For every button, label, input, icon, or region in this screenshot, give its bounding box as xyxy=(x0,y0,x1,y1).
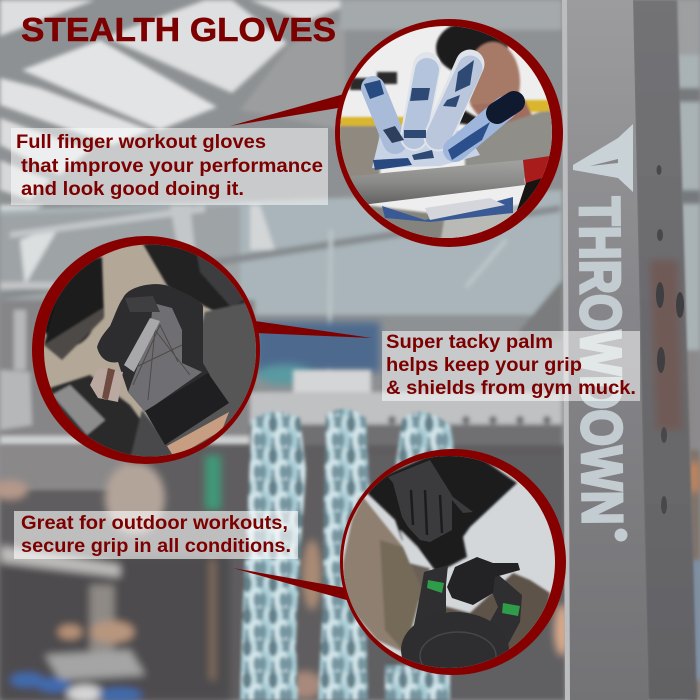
wrist xyxy=(167,412,229,456)
glove back and fingers xyxy=(97,284,210,412)
callout: full finger gloves: that improve your performance xyxy=(21,155,323,177)
callout: tacky palm: Super tacky palm xyxy=(386,331,553,353)
arrow: top callout pointer xyxy=(230,94,344,126)
callout: full finger gloves: and look good doing it. xyxy=(21,178,244,200)
callout: tacky palm: helps keep your grip xyxy=(386,354,582,376)
bar xyxy=(350,160,525,205)
chains xyxy=(240,409,456,700)
logo mark xyxy=(573,124,633,192)
callout: outdoor workouts: Great for outdoor workouts, xyxy=(21,512,288,534)
lower hand xyxy=(447,557,520,605)
kettlebell xyxy=(401,566,522,668)
green tape bands xyxy=(427,580,444,593)
rack post with logo xyxy=(562,0,697,700)
callout: full finger gloves: Full finger workout gloves xyxy=(16,131,266,153)
callout: tacky palm: & shields from gym muck. xyxy=(386,377,636,399)
callout: outdoor workouts: secure grip in all conditions. xyxy=(21,535,291,557)
callout: full finger gloves xyxy=(11,128,328,205)
dumbbell handle xyxy=(124,318,160,372)
logo wordmark: THROWDOWN xyxy=(567,197,634,525)
arrow: bottom callout pointer xyxy=(233,568,350,601)
logo dot xyxy=(614,528,628,542)
title: STEALTH GLOVES xyxy=(21,11,336,48)
photo circle: gloves on kettlebell outdoors xyxy=(335,449,566,688)
photo circle: tacky palm gripping dumbbell xyxy=(30,235,270,475)
upper glove xyxy=(388,460,473,542)
red handle xyxy=(523,156,550,189)
callout: outdoor workouts xyxy=(14,511,298,559)
photo circle: camo glove on bar xyxy=(330,19,563,250)
arrow: middle callout pointer xyxy=(255,321,372,338)
callout: tacky palm xyxy=(382,331,640,401)
glove xyxy=(364,60,514,222)
glove cuff xyxy=(145,373,229,445)
